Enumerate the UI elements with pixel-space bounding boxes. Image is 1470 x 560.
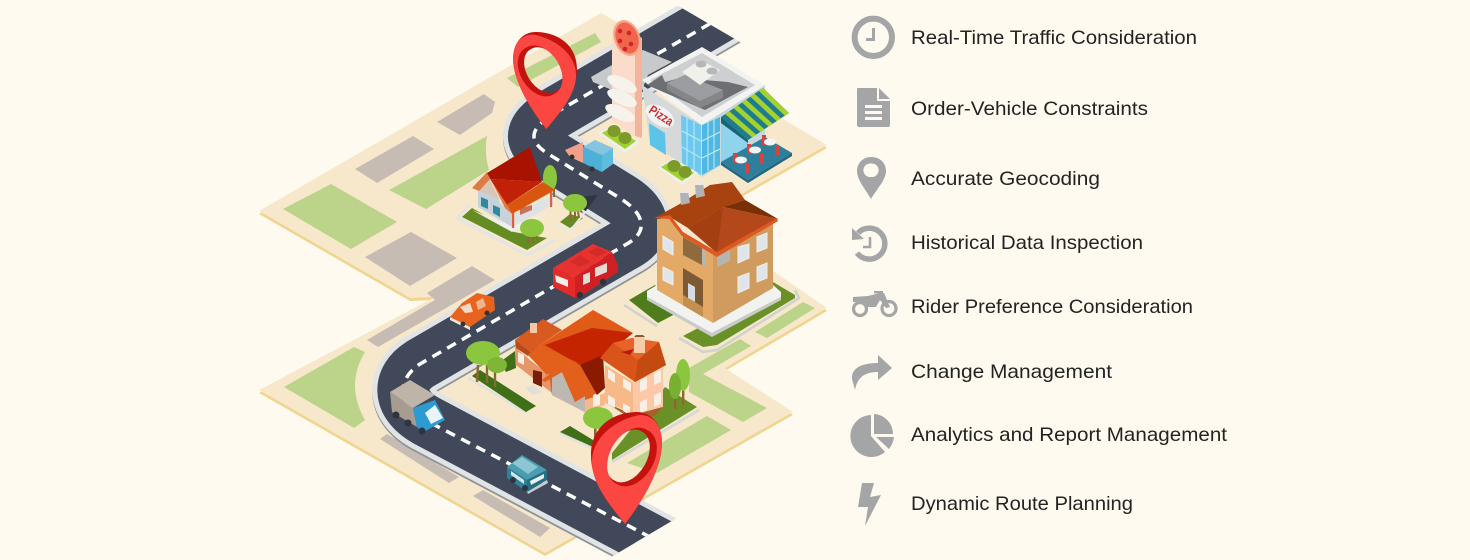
pizza sign pole xyxy=(603,16,646,138)
road shadow from trees xyxy=(572,195,598,212)
feature: real-time traffic xyxy=(855,19,1197,56)
large orange-roof house xyxy=(515,310,666,420)
small house with red roof xyxy=(472,147,555,232)
delivery van with blue box xyxy=(565,140,613,172)
feature: change management: Change Management xyxy=(911,361,1113,383)
planters with bushes xyxy=(598,125,698,185)
lower house lot xyxy=(468,351,699,462)
map pin: bottom xyxy=(591,412,662,524)
large brown house xyxy=(647,182,781,337)
icon: lightning bolt xyxy=(858,483,881,526)
grey box truck with blue cab xyxy=(390,380,445,434)
icon: history clock xyxy=(852,228,885,259)
tree behind small house xyxy=(543,165,557,197)
feature: rider preference xyxy=(853,291,1193,318)
feature: change management xyxy=(852,355,1113,390)
house lot: small house xyxy=(457,193,585,255)
feature: order-vehicle constraints xyxy=(857,88,1148,127)
orange pickup car xyxy=(450,293,495,330)
icon: pie chart xyxy=(850,414,894,457)
land base xyxy=(259,13,827,556)
feature: dynamic route planning: Dynamic Route Planning xyxy=(911,493,1133,515)
red camper bus xyxy=(553,244,618,298)
icon: motorbike xyxy=(853,291,896,316)
map pin: top xyxy=(513,32,577,129)
feature: historical data xyxy=(852,228,1143,259)
icon: location pin xyxy=(857,157,886,199)
winding road xyxy=(403,5,740,560)
large house lot xyxy=(624,282,799,352)
pizza shop canopy slab xyxy=(591,50,672,90)
feature: accurate geocoding: Accurate Geocoding xyxy=(911,168,1100,190)
feature: dynamic route planning xyxy=(858,483,1133,526)
icon: document xyxy=(857,88,890,127)
feature: historical data: Historical Data Inspection xyxy=(911,232,1143,254)
icon: curved arrow xyxy=(852,355,892,390)
icon: clock xyxy=(855,19,892,56)
feature list xyxy=(850,19,1228,526)
feature: analytics and report: Analytics and Report Management xyxy=(911,424,1228,446)
pizza shop building: Pizza xyxy=(646,103,677,129)
feature: rider preference: Rider Preference Consideration xyxy=(911,296,1193,318)
teal jeep xyxy=(507,455,548,494)
grey parcels xyxy=(355,94,550,537)
feature: real-time traffic: Real-Time Traffic Consideration xyxy=(911,27,1197,49)
pizza shop building xyxy=(642,47,765,177)
trees near small house xyxy=(520,194,587,243)
feature: accurate geocoding xyxy=(857,157,1100,199)
feature: analytics and report xyxy=(850,414,1228,457)
patio with tables xyxy=(721,135,792,183)
green parcels xyxy=(283,33,815,473)
feature: order-vehicle constraints: Order-Vehicle Constraints xyxy=(911,98,1148,120)
isometric city map illustration xyxy=(259,5,827,560)
striped awning xyxy=(721,88,789,170)
trees near lower house xyxy=(466,341,690,442)
